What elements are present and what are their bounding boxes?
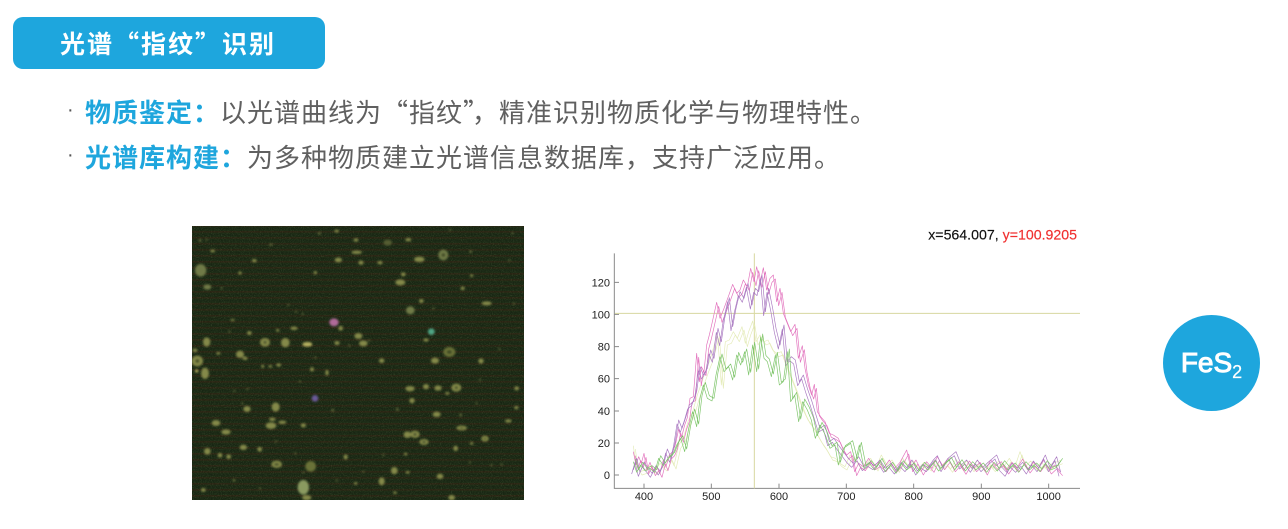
chart axes and ticks	[614, 253, 1080, 488]
FeS2 badge: FeS2	[1181, 347, 1242, 382]
text: ·	[67, 144, 75, 166]
x axis labels: 700	[837, 491, 856, 503]
x axis labels: 500	[702, 491, 721, 503]
y axis labels: 120	[592, 277, 610, 289]
y axis labels: 0	[604, 470, 610, 482]
bullet: spectral library: 光谱库构建：为多种物质建立光谱信息数据库，支持广泛应用。	[85, 138, 841, 175]
cursor readout: x=564.007, y=100.9205	[928, 228, 1077, 244]
text: ·	[67, 99, 75, 121]
FeS2 badge	[1163, 315, 1260, 411]
y axis labels: 60	[598, 374, 610, 386]
y axis labels: 40	[598, 406, 610, 418]
spectrum chart	[592, 228, 1080, 503]
bullet: substance identification: 物质鉴定：以光谱曲线为“指纹”，精准识别物质化学与物理特性。	[85, 93, 877, 130]
title banner	[13, 17, 325, 69]
y axis labels: 100	[592, 309, 610, 321]
x axis labels: 1000	[1036, 491, 1061, 503]
crosshair	[615, 253, 1080, 488]
x axis labels: 400	[635, 491, 653, 503]
y axis labels	[592, 277, 610, 482]
y axis labels: 80	[598, 342, 610, 354]
y axis labels: 20	[598, 438, 610, 450]
x axis labels: 600	[770, 491, 788, 503]
title banner: 光谱“指纹”识别	[60, 25, 276, 61]
x axis labels: 800	[904, 491, 923, 503]
spectrum curves	[632, 267, 1063, 477]
x axis labels: 900	[972, 491, 991, 503]
x axis labels	[635, 491, 1061, 503]
microscope image	[192, 226, 524, 500]
